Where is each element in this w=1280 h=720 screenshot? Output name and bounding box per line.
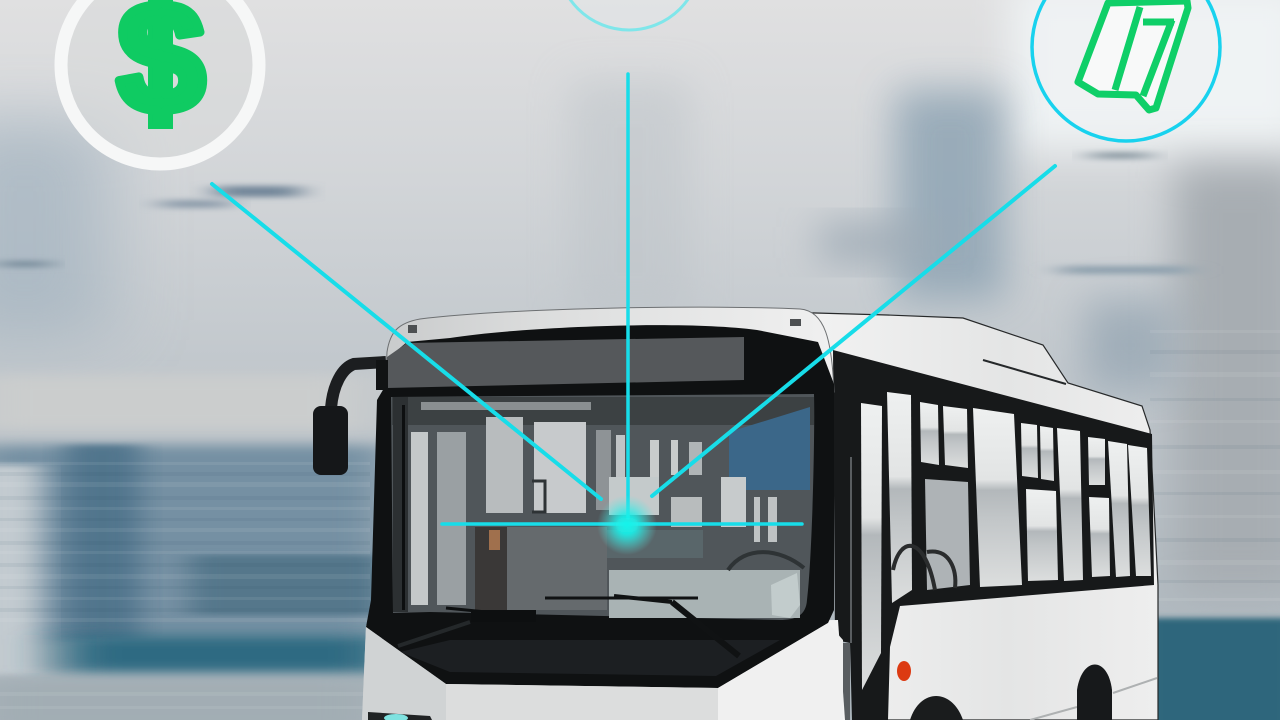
wing mirror [313, 360, 388, 475]
side windows [861, 392, 1151, 690]
red marker light [897, 661, 911, 681]
cap logos [408, 319, 801, 333]
glowing hub [597, 495, 657, 555]
rear wheel arch [1077, 664, 1112, 720]
bus side body [780, 312, 1158, 720]
icon: partial circle top centre [557, 0, 701, 30]
steering wheel in side window [893, 546, 955, 590]
icon: open book [1032, 0, 1220, 141]
windscreen wipers [398, 596, 739, 656]
right lower corner body panel [718, 623, 843, 720]
front lower panels [362, 620, 845, 720]
lower dash panel [400, 640, 780, 676]
windshield frame and lower black band [366, 325, 834, 688]
cabin interior [392, 397, 814, 618]
front wheel arch [910, 696, 963, 720]
front roof cap [385, 307, 834, 392]
bus [313, 307, 1158, 720]
door pillar with grey strip [835, 457, 852, 720]
bus side window band [833, 350, 1154, 720]
destination display [387, 337, 744, 388]
left lower corner body panel [362, 627, 446, 720]
icon: dollar coin [61, 0, 259, 164]
connector lines from hub to icons [212, 74, 1055, 524]
windshield glass [391, 394, 814, 620]
horizontal streak texture [0, 330, 1280, 709]
roof vent line [983, 360, 1066, 384]
lower side trim [1030, 678, 1157, 720]
headlight [368, 712, 432, 720]
front centre panel [446, 684, 718, 720]
